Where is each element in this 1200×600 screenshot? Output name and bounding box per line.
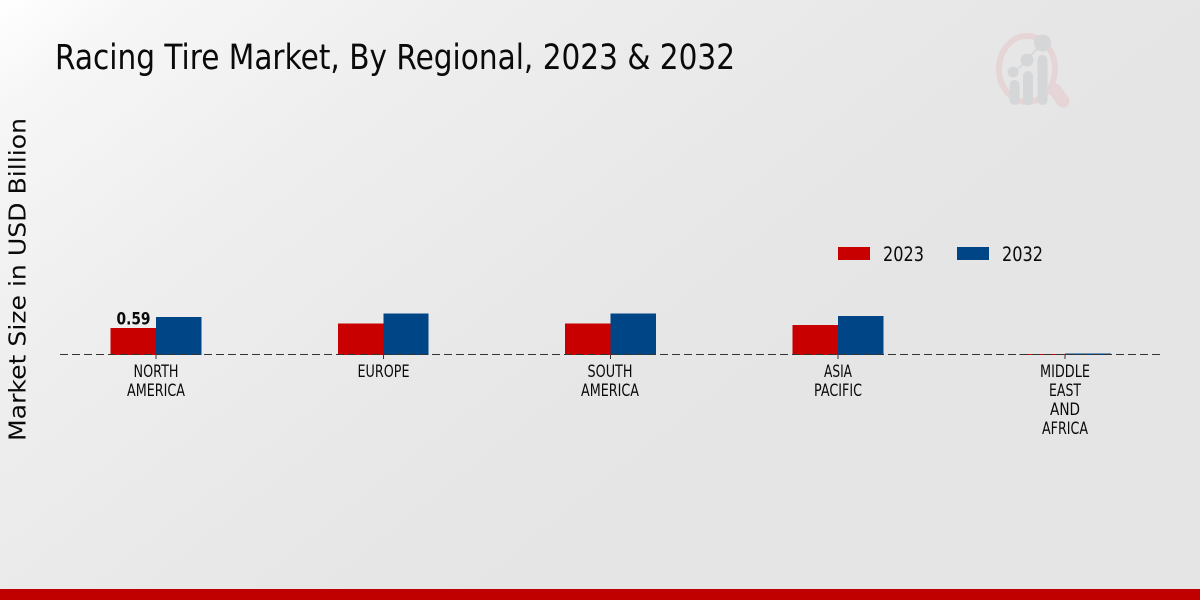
category labels: [127, 362, 1090, 439]
data label: 0.59: [116, 310, 150, 328]
bars: South America: [565, 314, 656, 355]
label: Middle East and Africa: EAST: [1049, 381, 1081, 401]
y axis label: Market Size in USD Billion: [6, 118, 32, 441]
bar chart: [60, 310, 1160, 359]
legend swatch 2032: [957, 247, 989, 260]
tick marks: [156, 355, 1065, 359]
icon: watermark logo: [999, 34, 1063, 105]
legend: [838, 243, 1043, 266]
bars: North America: [110, 317, 202, 355]
label: North America: NORTH: [134, 362, 178, 382]
bars: Middle East and Africa: [1020, 354, 1111, 355]
legend label 2023: 2023: [883, 243, 924, 266]
label: Middle East and Africa: [1040, 362, 1090, 439]
label: Middle East and Africa: MIDDLE: [1040, 362, 1090, 382]
baseline: [60, 354, 1160, 356]
legend label 2032: 2032: [1002, 243, 1043, 266]
legend swatch 2023: [838, 247, 870, 260]
bars: Asia Pacific: [792, 316, 884, 355]
label: Asia Pacific: PACIFIC: [814, 381, 862, 401]
label: Europe: EUROPE: [358, 362, 410, 382]
footer bar: [0, 589, 1200, 600]
label: South America: SOUTH: [588, 362, 632, 382]
bars: Europe: [338, 314, 428, 355]
label: Middle East and Africa: AFRICA: [1042, 419, 1088, 439]
label: North America: AMERICA: [127, 381, 185, 401]
label: South America: [581, 362, 639, 401]
label: Asia Pacific: ASIA: [824, 362, 852, 382]
label: North America: [127, 362, 185, 401]
label: Asia Pacific: [814, 362, 862, 401]
title: Racing Tire Market, By Regional, 2023 & 2032: [55, 38, 735, 78]
label: South America: AMERICA: [581, 381, 639, 401]
label: Middle East and Africa: AND: [1050, 400, 1080, 420]
